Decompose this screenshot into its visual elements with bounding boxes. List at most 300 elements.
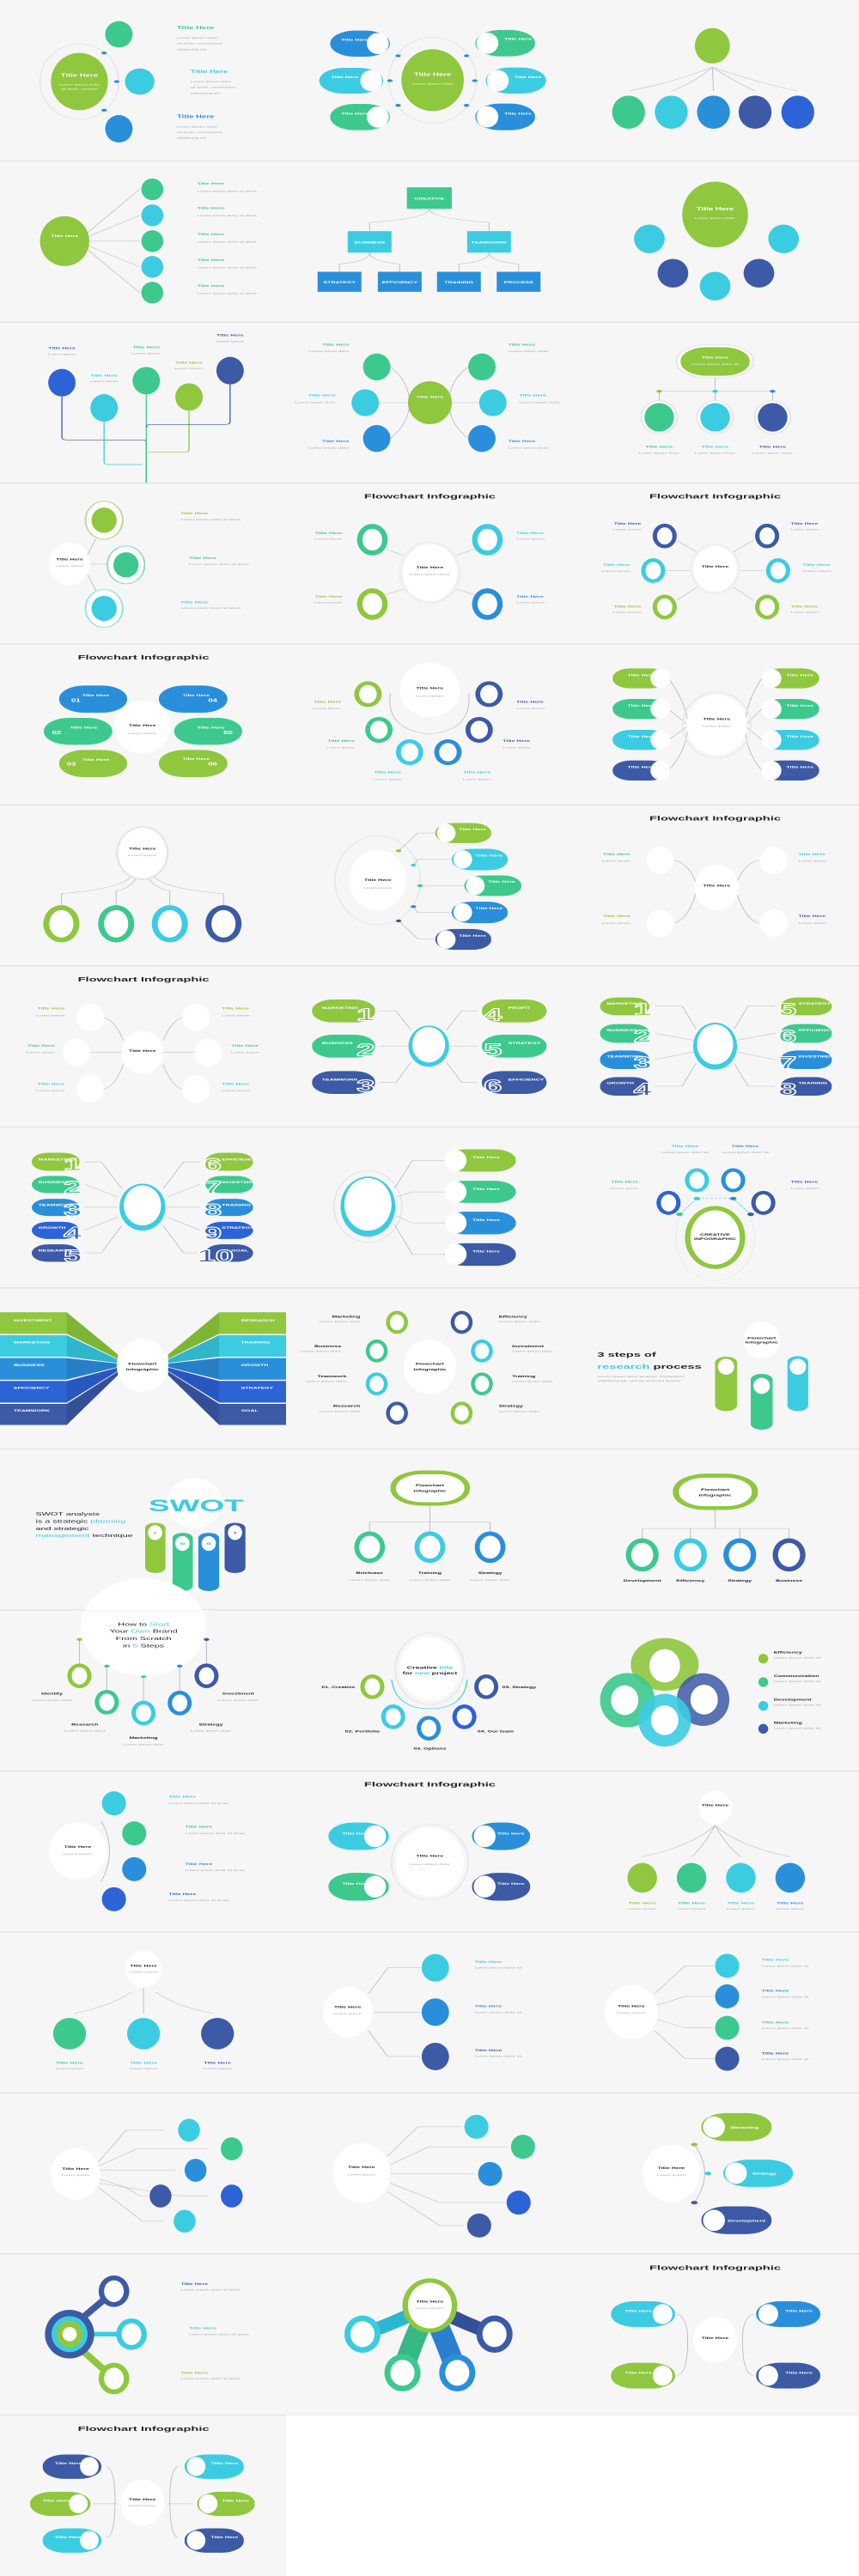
- panel: row8 col1 numbers 1-10: 10: [197, 1247, 234, 1266]
- panel: row6 col3 white circles flowchart: Title Here: [798, 915, 825, 918]
- panel: row8 col1 numbers 1-10: GROWTH: [39, 1227, 66, 1230]
- panel: row4 col2 flowchart four rings: Title Here: [516, 532, 544, 535]
- panel: row5 col2 arc bubbles: Lorem ipsum: [374, 778, 402, 781]
- panel: row9 col1 funnel: BUSINESS: [14, 1364, 45, 1367]
- panel: row15 col3 flowchart four pills: Title Here: [785, 2310, 813, 2313]
- panel: row6 col2 five pill list: Lorem ipsum: [363, 886, 393, 889]
- panel: row9 col1 funnel: [0, 1312, 286, 1425]
- panel: row3 col3 top pill with three circles: Lorem ipsum dolor: [752, 452, 794, 454]
- panel: row1 col1 mind map: Title Here: [191, 69, 228, 74]
- panel: row11 col1 brand steps: Strategy: [199, 1723, 224, 1727]
- panel: row9 col1 funnel: TEAMWORK: [14, 1409, 50, 1413]
- panel: row7 col2 numbers 1-6: MARKETING: [322, 1006, 358, 1010]
- panel: row5 col3 eight pills: Title Here: [704, 718, 730, 721]
- panel: row10 col2 three ring hierarchy: Flowchart: [416, 1484, 444, 1487]
- panel: row6 col1 white circle hierarchy: Title Here: [129, 848, 156, 851]
- panel: row3 col2 six bubbles: Title Here: [417, 396, 443, 399]
- panel: row5 col2 arc bubbles: Title Here: [314, 701, 341, 704]
- panel: row11 col3 overlapping circles with legend: Marketing: [774, 1722, 802, 1725]
- panel: row3 col1 tree lines: Title Here: [48, 347, 76, 350]
- panel: row8 col1 numbers 1-10: 7: [204, 1178, 222, 1197]
- panel: row3 col2 six bubbles: Lorem ipsum dolor: [308, 349, 350, 353]
- panel: row1 col1 mind map: Title Here: [177, 114, 214, 119]
- panel: row4 col1 ring chain: Lorem ipsum dolor sit amet,: [180, 607, 241, 610]
- panel: row2 col1 branches: Lorem ipsum dolor sit amet,: [198, 292, 258, 295]
- panel: row9 col2 eight bubbles: Lorem ipsum dolor: [301, 1350, 342, 1352]
- panel: row10 col3 four ring hierarchy: Flowchart: [701, 1488, 729, 1492]
- panel: row1 col2 pills around circle: Title Here: [414, 72, 451, 77]
- panel: row9 col1 funnel: GOAL: [241, 1409, 259, 1413]
- panel: row7 col3 numbers 1-8: 4: [634, 1080, 652, 1099]
- panel: row9 col1 funnel: Flowchart: [128, 1363, 157, 1366]
- panel: row6 col3 white circles flowchart: Title Here: [798, 853, 825, 856]
- panel: row14 col2 scattered circles: Title Here: [348, 2166, 375, 2169]
- panel: row5 col3 eight pills: Title Here: [786, 735, 813, 738]
- panel: row4 col3 flowchart six rings: Title Here: [614, 522, 641, 526]
- panel: row7 col2 numbers 1-6: 6: [484, 1077, 502, 1096]
- panel: row11 col1 brand steps: Lorem ipsum dolor: [64, 1729, 106, 1732]
- panel: row7 col3 numbers 1-8: BUSINESS: [606, 1029, 637, 1032]
- panel: row7 col2 numbers 1-6: EFFICIENCY: [509, 1078, 545, 1082]
- panel: row15 col1 nested rings: Title Here: [180, 2282, 208, 2286]
- panel: row13 col3 four branch circles: Title Here: [762, 2052, 789, 2056]
- panel: row7 col1 six white circles: Title Here: [222, 1083, 249, 1086]
- panel: row4 col3 flowchart six rings: Title Here: [603, 564, 631, 567]
- panel: row13 col2 three branch circles: Lorem ipsum dolor sit: [475, 2011, 522, 2014]
- panel: row8 col1 numbers 1-10: MARKETING: [39, 1158, 75, 1162]
- panel: row3 col1 tree lines: Lorem ipsum: [174, 367, 204, 370]
- panel: row7 col1 six white circles: Title Here: [231, 1044, 259, 1048]
- panel: row11 col1 brand steps: Your Own Brand: [110, 1628, 178, 1634]
- panel: row12 col2 four pills: Title Here: [497, 1883, 525, 1886]
- panel: row12 col1 four bubbles arc: Title Here: [168, 1893, 196, 1896]
- panel: row4 col3 flowchart six rings: Lorem ipsum: [602, 569, 631, 572]
- panel: row9 col3 research process: Lorem ipsum dolor sit amet, consectetur: [597, 1375, 685, 1378]
- panel: row9 col3 research process: 3 steps of: [597, 1351, 656, 1358]
- panel: row12 col1 four bubbles arc: Lorem ipsum dolor sit amet,: [168, 1801, 229, 1804]
- panel: row13 col3 four branch circles: [605, 1953, 809, 2071]
- panel: row4 col2 flowchart four rings: Lorem ipsum: [516, 538, 545, 540]
- panel: row15 col3 flowchart four pills: [611, 2264, 820, 2389]
- panel: row12 col3 four circle hierarchy: [627, 1790, 805, 1911]
- panel: row4 col1 ring chain: Title Here: [56, 558, 83, 562]
- panel: row10 col1 SWOT: W: [180, 1543, 186, 1546]
- panel: row12 col1 four bubbles arc: Title Here: [186, 1826, 212, 1829]
- panel: row14 col1 scattered circles: Lorem ipsum: [61, 2174, 90, 2177]
- panel: row9 col2 eight bubbles: Infographic: [413, 1368, 446, 1371]
- panel: row12 col2 four pills: Title Here: [342, 1883, 369, 1886]
- panel: row7 col1 six white circles: Title Here: [129, 1049, 156, 1053]
- panel: row13 col1 three circles: Lorem ipsum: [55, 2067, 84, 2070]
- panel: row12 col2 four pills: Title Here: [497, 1832, 525, 1836]
- panel: row2 col2 org chart: TRAINING: [444, 281, 473, 284]
- panel: row5 col1 numbered pills: 02: [52, 730, 61, 735]
- panel: row5 col2 arc bubbles: Title Here: [417, 687, 443, 690]
- panel: row16 col1 flowchart six pills: Title Here: [211, 2537, 238, 2539]
- panel: row4 col3 flowchart six rings: Lorem ipsum: [790, 528, 819, 531]
- panel: row7 col2 numbers 1-6: 1: [356, 1005, 375, 1024]
- panel: row3 col2 six bubbles: Title Here: [308, 394, 336, 398]
- panel: row9 col2 eight bubbles: Investment: [512, 1345, 544, 1348]
- panel: row11 col3 overlapping circles with legend: Development: [774, 1698, 812, 1702]
- panel: row15 col3 flowchart four pills: Title Here: [785, 2372, 813, 2375]
- panel: row4 col3 flowchart six rings: Lorem ipsum: [790, 611, 819, 614]
- panel: row13 col1 three circles: Title Here: [204, 2062, 231, 2065]
- panel: row7 col3 numbers 1-8: INVESTMENT: [798, 1055, 838, 1059]
- panel: row11 col3 overlapping circles with legend: Communication: [774, 1674, 819, 1678]
- panel: row10 col2 three ring hierarchy: Lorem ipsum dolor: [410, 1578, 451, 1581]
- panel: row9 col3 research process: Infographic: [746, 1341, 778, 1345]
- panel: row13 col2 three branch circles: Lorem ipsum: [333, 2012, 362, 2015]
- panel: row6 col1 white circle hierarchy: Lorem ipsum: [128, 854, 157, 856]
- panel: row14 col1 scattered circles: Title Here: [62, 2167, 89, 2171]
- panel: row3 col1 tree lines: Lorem ipsum: [132, 352, 161, 355]
- panel: row3 col1 tree lines: Lorem ipsum: [216, 340, 245, 343]
- panel: row2 col1 branches: Title Here: [198, 285, 224, 288]
- panel: row13 col1 three circles: Title Here: [56, 2062, 83, 2065]
- panel: row8 col3 creative infographic: Title Here: [611, 1181, 638, 1184]
- panel: row4 col1 ring chain: Lorem ipsum dolor sit amet,: [189, 562, 250, 565]
- panel: row3 col2 six bubbles: [295, 343, 560, 452]
- panel: row9 col2 eight bubbles: Lorem ipsum dolor: [512, 1380, 553, 1382]
- panel: row6 col3 white circles flowchart: Flowchart Infographic: [649, 815, 782, 822]
- panel: row9 col3 research process: research process: [597, 1363, 702, 1370]
- panel: row3 col1 tree lines: Lorem ipsum: [48, 353, 76, 355]
- panel: row16 col1 flowchart six pills: Title Here: [55, 2537, 82, 2539]
- panel: row3 col1 tree lines: Title Here: [175, 361, 203, 365]
- panel: row8 col3 creative infographic: INFOGRAPHIC: [694, 1238, 736, 1241]
- panel: row8 col3 creative infographic: Title Here: [790, 1181, 818, 1184]
- panel: row8 col3 creative infographic: Title Here: [672, 1145, 698, 1148]
- panel: row4 col2 flowchart four rings: Title Here: [417, 566, 443, 569]
- panel: row8 col1 numbers 1-10: 4: [64, 1224, 82, 1242]
- panel: row2 col1 branches: Lorem ipsum dolor sit amet,: [198, 266, 258, 269]
- panel: row11 col3 overlapping circles with legend: Efficiency: [774, 1651, 803, 1655]
- panel: row11 col1 brand steps: Lorem ipsum dolor: [123, 1743, 164, 1746]
- panel: row5 col1 numbered pills: 05: [223, 730, 234, 735]
- panel: row5 col2 arc bubbles: Lorem ipsum: [416, 695, 444, 697]
- panel: row8 col3 creative infographic: Title Here: [732, 1145, 758, 1148]
- panel: row3 col3 top pill with three circles: Title Here: [702, 446, 728, 449]
- panel: row4 col3 flowchart six rings: Title Here: [702, 566, 728, 568]
- panel: row6 col2 five pill list: Title Here: [459, 828, 486, 831]
- panel: row9 col1 funnel: GROWTH: [241, 1364, 268, 1367]
- panel: row2 col2 org chart: BUSINESS: [354, 241, 385, 245]
- panel: row13 col1 three circles: Title Here: [130, 1965, 157, 1968]
- panel: row16 col1 flowchart six pills: Title Here: [55, 2463, 82, 2465]
- panel: row5 col1 numbered pills: Title Here: [198, 726, 224, 730]
- panel: row15 col1 nested rings: Lorem ipsum dolor sit amet,: [180, 2377, 241, 2380]
- panel: row12 col3 four circle hierarchy: Title Here: [678, 1902, 705, 1905]
- panel: row8 col1 numbers 1-10: BUSINESS: [39, 1181, 70, 1184]
- panel: row3 col2 six bubbles: Title Here: [322, 440, 350, 443]
- panel: row10 col1 SWOT: SWOT analysis: [35, 1511, 101, 1516]
- panel: row10 col2 three ring hierarchy: Lorem ipsum dolor: [350, 1578, 391, 1581]
- panel: row3 col2 six bubbles: Lorem ipsum dolor: [509, 349, 550, 353]
- panel: row3 col3 top pill with three circles: [639, 345, 794, 454]
- panel: row5 col2 arc bubbles: Lorem ipsum: [326, 746, 355, 749]
- panel: row7 col3 numbers 1-8: 7: [778, 1054, 796, 1072]
- panel: row3 col2 six bubbles: Lorem ipsum dolor: [519, 401, 560, 404]
- panel: row13 col2 three branch circles: Lorem ipsum dolor sit: [475, 1966, 522, 1969]
- panel: row1 col2 pills around circle: Title Here: [504, 38, 532, 41]
- panel: row7 col2 numbers 1-6: [312, 999, 546, 1096]
- panel: row4 col1 ring chain: [49, 501, 250, 627]
- panel: row13 col2 three branch circles: Lorem ipsum dolor sit: [475, 2055, 522, 2057]
- panel: row1 col1 mind map: adipiscing elit: [177, 48, 207, 51]
- panel: row2 col2 org chart: PROCESS: [504, 281, 533, 284]
- panel: row13 col1 three circles: Lorem ipsum: [130, 2067, 158, 2070]
- panel: row5 col1 numbered pills: Title Here: [129, 724, 156, 727]
- panel: row2 col3 bubbles around circle: [634, 182, 799, 301]
- panel: row10 col1 SWOT: and strategic: [35, 1526, 89, 1531]
- panel: row13 col3 four branch circles: Title Here: [618, 2005, 645, 2008]
- panel: row10 col1 SWOT: SWOT: [149, 1497, 244, 1516]
- panel: row6 col3 white circles flowchart: Title Here: [704, 884, 730, 888]
- panel: row4 col2 flowchart four rings: Lorem ipsum: [516, 601, 545, 604]
- panel: row2 col1 branches: Lorem ipsum dolor sit amet,: [198, 214, 258, 216]
- panel: row6 col2 five pill list: Title Here: [488, 881, 515, 884]
- panel: row15 col1 nested rings: Lorem ipsum dolor sit amet,: [180, 2288, 241, 2291]
- panel: row12 col3 four circle hierarchy: Lorem ipsum: [678, 1908, 706, 1911]
- panel: row12 col1 four bubbles arc: Lorem ipsum dolor sit amet,: [186, 1832, 246, 1834]
- panel: row8 col2 big ring with four pills: [334, 1149, 516, 1266]
- panel: row13 col2 three branch circles: [323, 1954, 522, 2070]
- panel: row15 col3 flowchart four pills: Title Here: [702, 2336, 728, 2340]
- panel: row8 col1 numbers 1-10: INVESTMENT: [222, 1181, 261, 1184]
- panel: row14 col1 scattered circles: [51, 2119, 243, 2233]
- panel: row11 col3 overlapping circles with legend: Lorem ipsum dolor sit: [774, 1680, 821, 1683]
- panel: row10 col2 three ring hierarchy: [350, 1470, 511, 1581]
- panel: row12 col3 four circle hierarchy: Title Here: [702, 1804, 728, 1807]
- panel: row11 col2 creative project: Creative title: [407, 1665, 453, 1670]
- panel: row1 col2 pills around circle: Lorem ipsum dolor: [412, 82, 454, 85]
- panel: row7 col2 numbers 1-6: TEAMWORK: [322, 1078, 358, 1082]
- panel: row13 col3 four branch circles: Lorem ipsum dolor sit: [762, 2026, 809, 2030]
- panel: row4 col2 flowchart four rings: Flowchart Infographic: [364, 493, 497, 500]
- panel: row8 col2 big ring with four pills: Title Here: [472, 1188, 500, 1191]
- panel: row7 col2 numbers 1-6: 5: [484, 1041, 502, 1060]
- panel: row9 col2 eight bubbles: Lorem ipsum dolor: [499, 1320, 540, 1323]
- panel: row14 col3 three labelled pills: Title Here: [658, 2166, 685, 2170]
- panel: row5 col3 eight pills: [612, 668, 819, 781]
- panel: row13 col3 four branch circles: Lorem ipsum: [617, 2011, 646, 2014]
- panel: row16 col1 flowchart six pills: Title Here: [211, 2463, 238, 2465]
- panel: row13 col1 three circles: Lorem ipsum: [204, 2067, 232, 2070]
- panel: row2 col3 bubbles around circle: Lorem ipsum dolor: [695, 216, 736, 219]
- panel: row12 col1 four bubbles arc: [49, 1791, 246, 1911]
- panel: row7 col3 numbers 1-8: GROWTH: [606, 1082, 634, 1085]
- panel: row8 col1 numbers 1-10: STRATEGY: [222, 1227, 254, 1230]
- panel: row4 col1 ring chain: Lorem ipsum dolor sit amet,: [180, 518, 241, 520]
- panel: row9 col2 eight bubbles: Lorem ipsum dolor: [306, 1380, 347, 1382]
- panel: row13 col3 four branch circles: Lorem ipsum dolor sit: [762, 1996, 809, 1998]
- panel: row13 col1 three circles: [53, 1951, 234, 2070]
- panel: row9 col2 eight bubbles: Strategy: [499, 1405, 524, 1408]
- panel: row12 col1 four bubbles arc: Lorem ipsum: [64, 1852, 92, 1855]
- panel: row10 col1 SWOT: T: [233, 1532, 237, 1535]
- panel: row7 col3 numbers 1-8: 3: [634, 1054, 652, 1072]
- panel: row5 col3 eight pills: Title Here: [786, 674, 813, 677]
- panel: row4 col3 flowchart six rings: Flowchart Infographic: [649, 493, 782, 500]
- panel: row4 col2 flowchart four rings: [314, 493, 545, 620]
- panel: row11 col2 creative project: for new project: [402, 1671, 458, 1675]
- panel: row6 col2 five pill list: Title Here: [364, 878, 392, 882]
- panel: row11 col2 creative project: 04. Our team: [478, 1730, 514, 1734]
- panel: row12 col3 four circle hierarchy: Title Here: [629, 1902, 656, 1905]
- panel: row4 col3 flowchart six rings: Lorem ipsum: [612, 528, 642, 531]
- panel: row6 col3 white circles flowchart: Lorem ipsum: [602, 921, 631, 924]
- panel: row8 col2 big ring with four pills: Title Here: [472, 1250, 500, 1254]
- panel: row7 col1 six white circles: Title Here: [222, 1007, 249, 1011]
- panel: row11 col3 overlapping circles with legend: Lorem ipsum dolor sit: [774, 1727, 821, 1729]
- panel: row5 col3 eight pills: Title Here: [627, 704, 655, 708]
- panel: row7 col1 six white circles: Lorem ipsum: [222, 1014, 251, 1017]
- panel: row9 col2 eight bubbles: Training: [512, 1375, 536, 1378]
- panel: row4 col2 flowchart four rings: Lorem ipsum dolor: [410, 573, 451, 575]
- center lime circle: Lorem ipsum dolor: [59, 83, 101, 86]
- panel: row9 col1 funnel: RESEARCH: [241, 1319, 275, 1322]
- panel: row6 col3 white circles flowchart: [602, 815, 827, 937]
- panel: row12 col3 four circle hierarchy: Lorem ipsum: [776, 1908, 805, 1911]
- panel: row13 col3 four branch circles: Lorem ipsum dolor sit: [762, 2057, 809, 2061]
- panel: row7 col1 six white circles: Lorem ipsum: [27, 1051, 55, 1054]
- panel: row14 col2 scattered circles: Lorem ipsum: [347, 2173, 375, 2176]
- panel: row12 col3 four circle hierarchy: Lorem ipsum: [727, 1908, 755, 1911]
- panel: row10 col3 four ring hierarchy: Development: [624, 1579, 661, 1583]
- panel: row7 col3 numbers 1-8: 1: [634, 1000, 652, 1019]
- panel: row11 col1 brand steps: How to Start: [118, 1621, 170, 1627]
- panel: row11 col1 brand steps: Research: [71, 1723, 99, 1727]
- panel: row5 col1 numbered pills: Flowchart Infographic: [78, 653, 210, 661]
- panel: row12 col3 four circle hierarchy: Title Here: [728, 1902, 754, 1905]
- panel: row6 col1 white circle hierarchy: [43, 826, 241, 943]
- panel: row5 col3 eight pills: Title Here: [627, 735, 655, 738]
- panel: row12 col1 four bubbles arc: Title Here: [64, 1845, 91, 1849]
- panel: row5 col1 numbered pills: 01: [71, 698, 81, 703]
- panel: row10 col1 SWOT: O: [206, 1543, 212, 1546]
- panel: row11 col1 brand steps: [32, 1578, 259, 1746]
- panel: row7 col1 six white circles: Lorem ipsum: [36, 1089, 64, 1092]
- panel: row6 col3 white circles flowchart: Title Here: [603, 915, 631, 918]
- panel: row3 col3 top pill with three circles: Title Here: [646, 446, 673, 449]
- panel: row7 col3 numbers 1-8: EFFICIENCY: [798, 1029, 834, 1032]
- panel: row15 col1 nested rings: Title Here: [189, 2327, 216, 2330]
- panel: row11 col2 creative project: 03. Options: [413, 1747, 446, 1751]
- panel: row8 col1 numbers 1-10: 2: [64, 1178, 82, 1197]
- panel: row3 col1 tree lines: Title Here: [90, 374, 118, 378]
- panel: row4 col2 flowchart four rings: Title Here: [315, 532, 342, 535]
- panel: row7 col2 numbers 1-6: 2: [356, 1041, 375, 1060]
- panel: row15 col2 flower: Title Here: [417, 2300, 443, 2304]
- panel: row4 col2 flowchart four rings: Lorem ipsum: [314, 601, 343, 604]
- panel: row5 col3 eight pills: Title Here: [627, 674, 655, 677]
- panel: row10 col3 four ring hierarchy: [624, 1473, 806, 1583]
- panel: row16 col1 flowchart six pills: Title Here: [222, 2500, 249, 2503]
- panel: row3 col1 tree lines: Title Here: [216, 334, 244, 337]
- panel: row5 col2 arc bubbles: Title Here: [516, 701, 544, 704]
- panel: row12 col2 four pills: [328, 1781, 530, 1901]
- panel: row15 col2 flower: [344, 2278, 513, 2391]
- panel: row7 col3 numbers 1-8: 8: [778, 1080, 796, 1099]
- panel: row4 col3 flowchart six rings: Title Here: [790, 522, 818, 526]
- panel: row5 col2 arc bubbles: [313, 663, 545, 781]
- panel: row4 col2 flowchart four rings: Title Here: [315, 595, 342, 598]
- panel: row3 col3 top pill with three circles: Lorem ipsum dolor: [695, 452, 736, 454]
- panel: row4 col3 flowchart six rings: Title Here: [614, 605, 641, 609]
- panel: row7 col2 numbers 1-6: 4: [484, 1005, 502, 1024]
- panel: row8 col1 numbers 1-10: 1: [64, 1155, 82, 1175]
- panel: row2 col1 branches: Title Here: [198, 207, 224, 210]
- panel: row4 col1 ring chain: Title Here: [180, 513, 208, 515]
- panel: row7 col2 numbers 1-6: BUSINESS: [322, 1042, 353, 1045]
- panel: row6 col3 white circles flowchart: Title Here: [603, 853, 631, 856]
- panel: row9 col2 eight bubbles: Lorem ipsum dolor: [320, 1410, 361, 1413]
- panel: row4 col1 ring chain: Title Here: [180, 601, 208, 605]
- panel: row7 col3 numbers 1-8: STRATEGY: [798, 1002, 831, 1005]
- panel: row15 col3 flowchart four pills: Title Here: [624, 2310, 652, 2313]
- panel: row4 col3 flowchart six rings: Lorem ipsum: [612, 611, 642, 614]
- panel: row2 col2 org chart: [318, 187, 540, 292]
- panel: row8 col1 numbers 1-10: TRAINING: [222, 1204, 251, 1207]
- panel: row4 col2 flowchart four rings: Lorem ipsum: [314, 538, 343, 540]
- panel: row2 col1 branches: Title Here: [198, 183, 224, 185]
- panel: row9 col3 research process: adipiscing elit, sed do eiusmod tempor: [597, 1379, 681, 1382]
- panel: row10 col2 three ring hierarchy: Infographic: [413, 1490, 446, 1493]
- panel: row1 col2 pills around circle: Title Here: [341, 112, 369, 116]
- panel: row7 col3 numbers 1-8: [600, 998, 838, 1099]
- panel: row14 col3 three labelled pills: Lorem ipsum: [657, 2174, 685, 2177]
- panel: row3 col2 six bubbles: Title Here: [322, 343, 350, 347]
- panel: row9 col1 funnel: EFFICIENCY: [14, 1387, 50, 1390]
- panel: row8 col1 numbers 1-10: GOAL: [231, 1249, 249, 1253]
- panel: row5 col1 numbered pills: Title Here: [82, 758, 109, 762]
- panel: row10 col3 four ring hierarchy: Business: [776, 1579, 802, 1583]
- panel: row5 col1 numbered pills: [44, 653, 242, 777]
- panel: row9 col2 eight bubbles: Flowchart: [416, 1363, 444, 1366]
- panel: row12 col2 four pills: Lorem ipsum dolor: [410, 1862, 451, 1865]
- panel: row4 col1 ring chain: Title Here: [189, 557, 216, 560]
- panel: row1 col1 mind map: Lorem ipsum dolor: [177, 125, 218, 128]
- panel: row9 col1 funnel: STRATEGY: [241, 1387, 274, 1390]
- panel: row5 col2 arc bubbles: Title Here: [463, 771, 490, 775]
- panel: row14 col3 three labelled pills: Strategy: [752, 2172, 777, 2176]
- panel: row5 col2 arc bubbles: Title Here: [327, 739, 355, 743]
- panel: row12 col2 four pills: Flowchart Infographic: [364, 1781, 497, 1788]
- panel: row5 col1 numbered pills: 03: [67, 762, 76, 767]
- panel: row6 col2 five pill list: [335, 823, 521, 950]
- panel: row7 col3 numbers 1-8: 5: [778, 1000, 796, 1019]
- panel: row6 col3 white circles flowchart: Lorem ipsum: [602, 860, 631, 862]
- panel: row15 col3 flowchart four pills: Title Here: [624, 2372, 652, 2375]
- panel: row13 col1 three circles: Title Here: [130, 2062, 157, 2065]
- panel: row11 col1 brand steps: Lorem ipsum dolor: [191, 1729, 232, 1732]
- panel: row15 col2 flower: Lorem ipsum: [416, 2306, 444, 2310]
- panel: row5 col1 numbered pills: 04: [208, 698, 218, 703]
- panel: row10 col2 three ring hierarchy: Strategy: [478, 1572, 503, 1575]
- panel: row15 col1 nested rings: [45, 2275, 250, 2394]
- panel: row10 col2 three ring hierarchy: Lorem ipsum dolor: [470, 1578, 511, 1581]
- panel: row7 col1 six white circles: Flowchart Infographic: [78, 975, 210, 983]
- panel: row9 col2 eight bubbles: Efficiency: [499, 1315, 528, 1319]
- panel: row4 col1 ring chain: Lorem ipsum: [55, 564, 84, 567]
- panel: row9 col2 eight bubbles: Teamwork: [317, 1375, 348, 1378]
- panel: row7 col2 numbers 1-6: 3: [356, 1077, 375, 1096]
- panel: row9 col2 eight bubbles: [301, 1311, 553, 1425]
- panel: row8 col3 creative infographic: Lorem ipsum: [610, 1188, 638, 1190]
- panel: row9 col2 eight bubbles: Lorem ipsum dolor: [499, 1410, 540, 1413]
- panel: row5 col3 eight pills: Title Here: [786, 766, 813, 769]
